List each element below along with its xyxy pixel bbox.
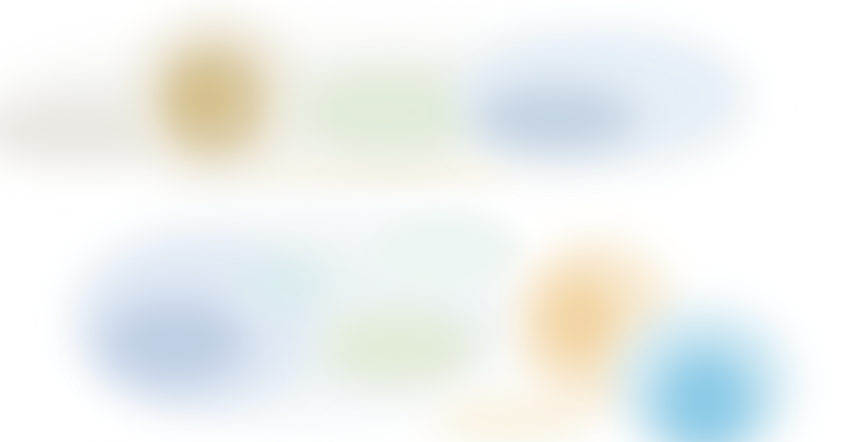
bottom edge: pale yellow haze <box>430 396 590 442</box>
top band: blue oval <box>455 30 745 160</box>
top band: green centre panel <box>295 68 485 156</box>
bottom band: blue oval <box>77 240 330 410</box>
bottom band: background haze <box>80 220 520 410</box>
centre pale teal oval <box>369 208 521 292</box>
top band: left grey-beige haze <box>0 98 165 162</box>
top band: golden circle <box>135 18 295 178</box>
bottom band: green centre panel <box>322 312 478 384</box>
bottom right: bright blue circle <box>617 307 793 442</box>
top band: background haze <box>0 48 740 184</box>
bottom right: orange circle <box>515 240 675 410</box>
